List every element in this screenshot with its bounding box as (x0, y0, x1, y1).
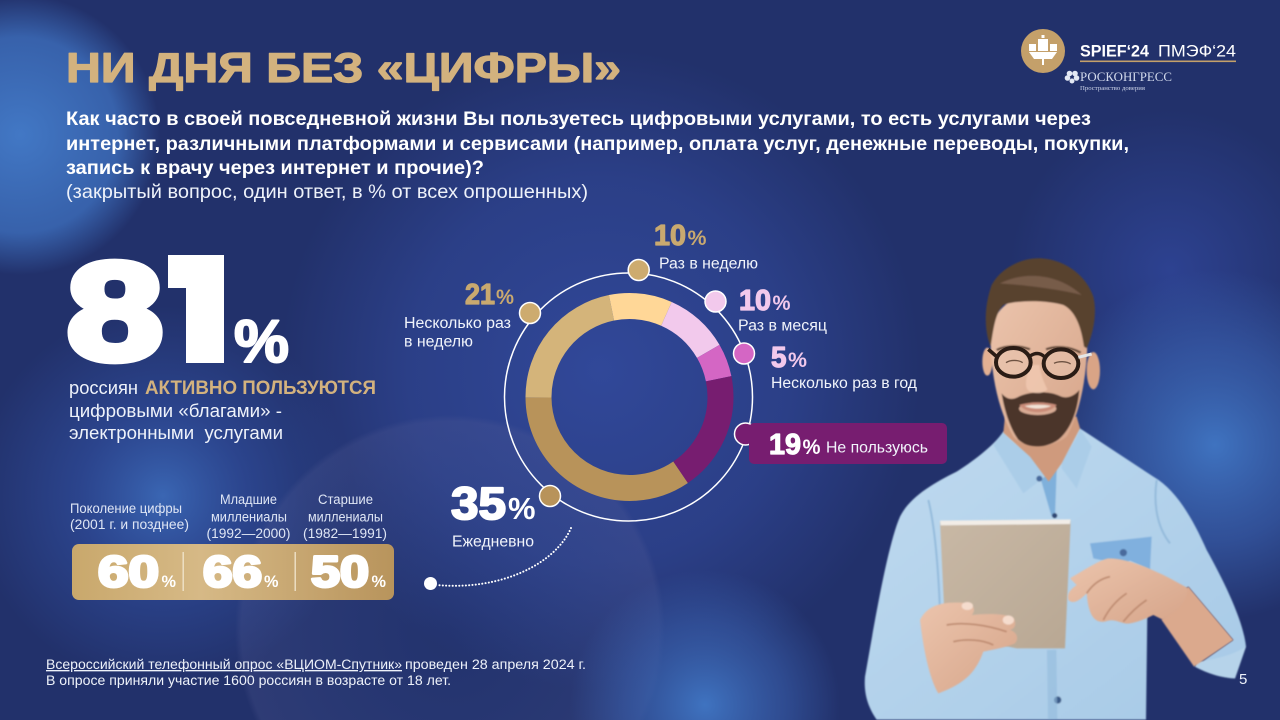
icon: Roscongress flower (1065, 71, 1079, 84)
generation labels: (1982—1991) (303, 526, 387, 541)
headline description (69, 377, 376, 443)
generation labels: миллениалы (211, 510, 287, 524)
illustration: man with tablet (865, 258, 1246, 720)
outer ring (504, 273, 752, 521)
hair (986, 258, 1095, 348)
logo text: SPIEF‘24 (1080, 42, 1150, 60)
label: 21% several times a week: в неделю (404, 334, 473, 350)
neck (1003, 417, 1080, 482)
question text (66, 108, 1129, 203)
generation values bar: 50 (311, 548, 369, 596)
right hand pointing (1068, 558, 1188, 624)
ring markers (520, 260, 756, 506)
label: 10% monthly: Раз в месяц (738, 318, 827, 334)
label: 35% daily (451, 478, 536, 550)
donut chart (504, 260, 756, 521)
icon: ship emblem (1021, 29, 1065, 73)
title: НИ ДНЯ БЕЗ «ЦИФРЫ» (66, 44, 621, 91)
headline description: россиян (69, 377, 138, 398)
callout: 19% do not use: Не пользуюсь (826, 440, 928, 456)
generation values bar: 60 (98, 548, 159, 596)
dotted arrow (424, 528, 571, 590)
headline stat: 81%: % (234, 308, 289, 375)
label: 21% several times a week: % (496, 286, 514, 309)
ears (982, 348, 992, 376)
left hand holding (920, 602, 1017, 693)
headline stat: 81%: 1 (165, 239, 227, 386)
generation values bar: % (264, 572, 278, 591)
generation labels: (2001 г. и позднее) (70, 517, 189, 532)
shirt (865, 428, 1246, 720)
generation values bar: % (162, 572, 176, 591)
headline description: АКТИВНО ПОЛЬЗУЮТСЯ (145, 378, 376, 399)
headline stat: 81%: 8 (67, 235, 163, 389)
label: 35% daily: % (508, 491, 536, 526)
label: 21% several times a week: Несколько раз (404, 315, 511, 332)
label: 21% several times a week: 21 (465, 279, 495, 311)
callout: 19% do not use (749, 423, 947, 464)
generation values bar: 66 (203, 548, 262, 596)
question text: Как часто в своей повседневной жизни Вы пользуетесь цифровыми услугами, то есть услугами через (66, 108, 1091, 130)
forearm (1162, 587, 1233, 667)
callout: 19% do not use: % (802, 436, 821, 459)
headline description: цифровыми «благами» - (69, 400, 282, 421)
logo: SPIEF / Roscongress: ПМЭФ‘24 (1158, 42, 1236, 60)
footer source note (46, 657, 586, 688)
generation values bar: % (372, 572, 386, 591)
label: 10% monthly (738, 285, 827, 334)
generation labels: Поколение цифры (70, 501, 182, 516)
label: 35% daily: 35 (451, 478, 506, 529)
head (982, 258, 1100, 446)
face (991, 297, 1087, 446)
logo: SPIEF / Roscongress: Пространство доверия (1080, 86, 1145, 92)
logo: SPIEF / Roscongress (1021, 29, 1236, 92)
glasses (988, 348, 1092, 378)
question text: (закрытый вопрос, один ответ, в % от всех опрошенных) (66, 181, 588, 203)
generation labels: (1992—2000) (206, 526, 290, 541)
tablet (940, 519, 1071, 648)
label: 5% several times a year: 5 (771, 342, 786, 374)
generation values bar (72, 544, 394, 600)
label: 10% weekly: % (688, 227, 707, 250)
generation labels: Младшие (220, 492, 277, 507)
question text: запись к врачу через интернет и прочие)? (66, 157, 484, 179)
generation labels: Старшие (318, 492, 373, 507)
footer source note: Всероссийский телефонный опрос «ВЦИОМ-Спутник» (46, 657, 402, 672)
label: 35% daily: Ежедневно (452, 534, 534, 550)
label: 10% monthly: 10 (739, 285, 771, 317)
label: 10% weekly: 10 (654, 220, 686, 252)
label: 10% weekly (654, 220, 758, 272)
beard (1002, 390, 1079, 446)
page number: 5 (1239, 671, 1247, 688)
footer source note: проведен 28 апреля 2024 г. (405, 657, 586, 672)
label: 5% several times a year: Несколько раз в год (771, 375, 917, 392)
label: 5% several times a year (771, 342, 917, 392)
footer source note: В опросе приняли участие 1600 россиян в возрасте от 18 лет. (46, 673, 451, 688)
donut segments (538, 306, 720, 488)
headline stat: 81% (68, 255, 288, 364)
headline description: электронными услугами (69, 422, 283, 443)
logo: SPIEF / Roscongress: РОСКОНГРЕСС (1080, 69, 1172, 84)
label: 21% several times a week (404, 279, 514, 350)
label: 5% several times a year: % (788, 349, 807, 372)
label: 10% monthly: % (772, 292, 791, 315)
generation labels (70, 492, 387, 541)
question text: интернет, различными платформами и сервисами (например, оплата услуг, денежные переводы, покупки, (66, 133, 1129, 155)
callout: 19% do not use: 19 (769, 429, 801, 461)
generation labels: миллениалы (308, 510, 383, 524)
label: 10% weekly: Раз в неделю (659, 256, 758, 272)
